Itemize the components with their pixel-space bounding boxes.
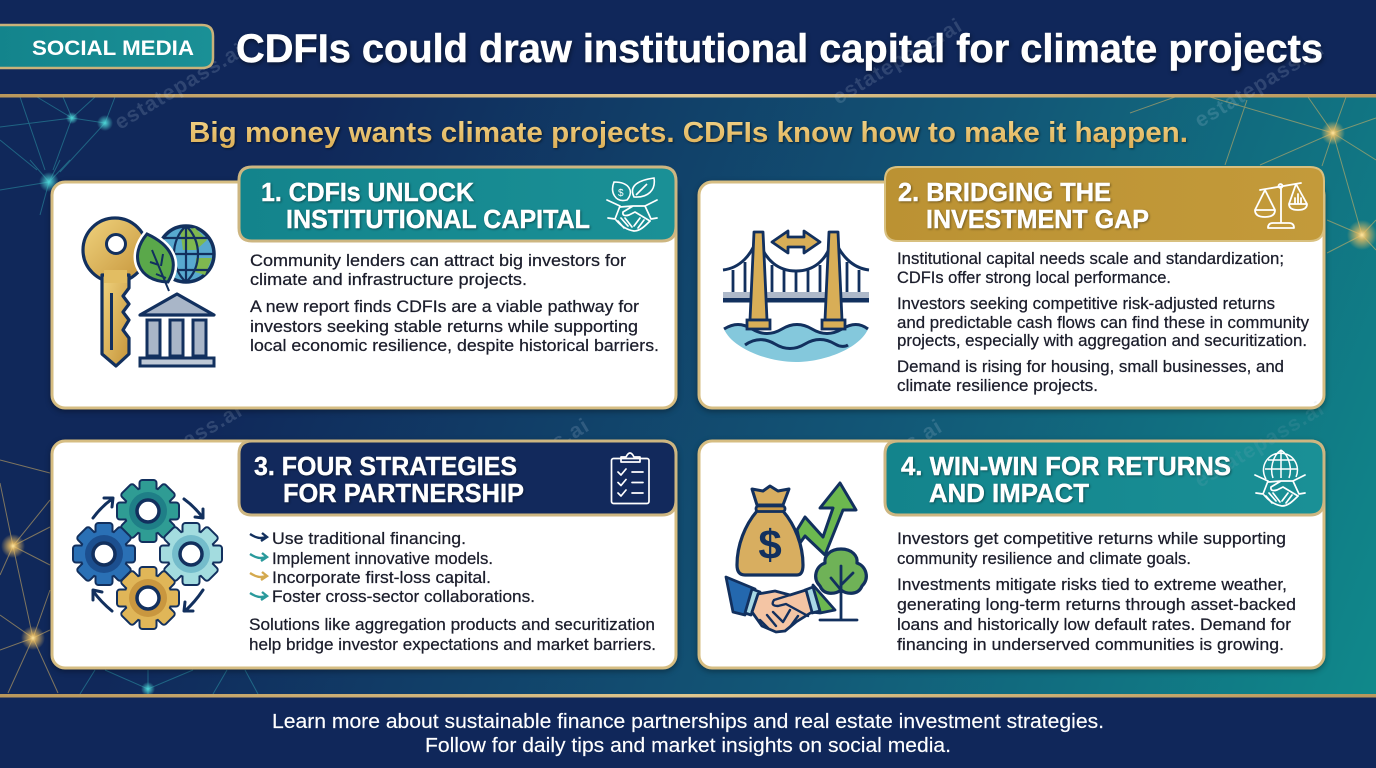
text: panel 2 body: and predictable cash flows can find these in community <box>897 313 1309 332</box>
text: panel 4 body: community resilience and climate goals. <box>897 549 1191 568</box>
header tab 3: 3. FOUR STRATEGIES <box>254 453 517 481</box>
list: four strategies with arrow bullets <box>250 529 535 606</box>
icon: money bag, arrow, tree and handshake: $ <box>758 521 782 568</box>
watermarks: estatepass.ai <box>829 14 966 109</box>
icon: clipboard checklist <box>612 453 649 504</box>
text: panel 3 body: help bridge investor expectations and market barriers. <box>249 635 656 654</box>
header bar <box>0 0 1376 98</box>
text: panel 2 body: Investors seeking competitive risk-adjusted returns <box>897 294 1275 313</box>
text: panel 3 body <box>249 615 656 654</box>
background network lines <box>0 97 1376 694</box>
header tab 3 <box>239 441 676 515</box>
text: panel 4 body <box>897 529 1296 654</box>
text: panel 1 body: A new report finds CDFIs are a viable pathway for <box>250 297 639 316</box>
panel: 1 CDFIs unlock institutional capital <box>52 167 676 408</box>
list: four strategies with arrow bullets: Use traditional financing. <box>272 529 466 548</box>
text: panel 4 body: Investors get competitive returns while supporting <box>897 529 1286 548</box>
icon: bridge <box>723 231 869 362</box>
icon: handshake with coin and leaf: $ <box>618 188 624 199</box>
header tab 4: AND IMPACT <box>929 480 1089 508</box>
text: panel 4 body: financing in underserved communities is growing. <box>897 635 1284 654</box>
header tab 1: 1. CDFIs UNLOCK <box>261 179 475 207</box>
text: panel 3 body: Solutions like aggregation products and securitization <box>249 615 655 634</box>
icon: balance scale <box>1255 183 1307 228</box>
background glow nodes <box>1 112 1376 696</box>
footer text <box>272 711 1104 757</box>
panel: 4 win-win for returns and impact <box>699 397 1328 668</box>
text: panel 1 body: investors seeking stable returns while supporting <box>250 317 638 336</box>
text: panel 2 body: Demand is rising for housing, small businesses, and <box>897 357 1284 376</box>
header tab 2 <box>885 167 1324 241</box>
text: panel 2 body: climate resilience projects. <box>897 376 1098 395</box>
footer text: Learn more about sustainable finance partnerships and real estate investment strategies. <box>272 711 1104 733</box>
list: four strategies with arrow bullets: Incorporate first-loss capital. <box>272 568 491 587</box>
badge: social media <box>0 25 213 68</box>
text: panel 1 body: climate and infrastructure projects. <box>250 270 527 289</box>
footer bar <box>0 694 1376 768</box>
text: panel 1 body <box>250 251 659 355</box>
watermark over tab 4: estatepass.ai <box>1191 397 1328 492</box>
icon: key, leaf, globe and bank <box>83 218 214 366</box>
watermarks: estatepass.ai <box>809 415 946 510</box>
footer text: Follow for daily tips and market insights on social media. <box>425 735 951 757</box>
header tab 4 <box>885 397 1328 515</box>
watermarks: estatepass.ai <box>1191 37 1328 132</box>
icon: handshake with coin and leaf <box>607 178 657 231</box>
text: panel 4 body: loans and historically low default rates. Demand for <box>897 615 1291 634</box>
text: panel 2 body: Institutional capital needs scale and standardization; <box>897 249 1284 268</box>
watermarks <box>109 14 1328 510</box>
text: panel 2 body: projects, especially with aggregation and securitization. <box>897 331 1307 350</box>
text: panel 4 body: generating long-term returns through asset-backed <box>897 595 1296 614</box>
text: panel 1 body: local economic resilience, despite historical barriers. <box>250 336 659 355</box>
watermarks: estatepass.ai <box>456 414 593 509</box>
header tab 4: 4. WIN-WIN FOR RETURNS <box>901 453 1231 481</box>
text: panel 1 body: Community lenders can attract big investors for <box>250 251 626 270</box>
list: four strategies with arrow bullets: Implement innovative models. <box>272 549 493 568</box>
panel: 2 bridging the investment gap <box>699 167 1324 408</box>
badge: social media: SOCIAL MEDIA <box>32 36 194 60</box>
header tab 1 <box>239 167 676 241</box>
header tab 1: INSTITUTIONAL CAPITAL <box>286 206 590 234</box>
panel: 3 four strategies for partnership <box>52 441 676 668</box>
text: panel 2 body: CDFIs offer strong local performance. <box>897 268 1171 287</box>
icon: money bag, arrow, tree and handshake <box>726 483 866 632</box>
header tab 2: INVESTMENT GAP <box>926 206 1149 234</box>
text: panel 2 body <box>897 249 1309 395</box>
watermarks: estatepass.ai <box>111 39 248 134</box>
title: CDFIs could draw institutional capital for climate projects <box>236 27 1323 71</box>
watermarks: estatepass.ai <box>109 399 246 494</box>
icon: globe and handshake <box>1255 450 1305 506</box>
header tab 2: 2. BRIDGING THE <box>898 179 1111 207</box>
list: four strategies with arrow bullets: Foster cross-sector collaborations. <box>272 587 535 606</box>
subtitle: Big money wants climate projects. CDFIs know how to make it happen. <box>189 117 1188 149</box>
header tab 3: FOR PARTNERSHIP <box>283 480 524 508</box>
text: panel 4 body: Investments mitigate risks tied to extreme weather, <box>897 575 1287 594</box>
icon: four gears with arrows <box>74 481 221 628</box>
